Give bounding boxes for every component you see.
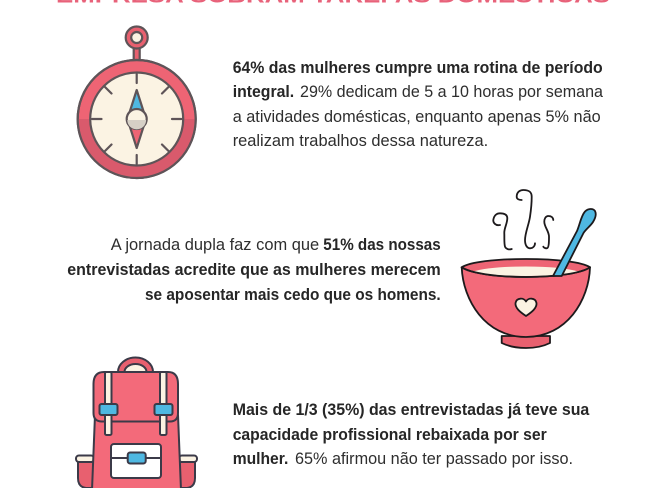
- text block: double shift: 51% das nossas: [323, 235, 441, 254]
- icon: bowl with steam and spoon: [462, 190, 596, 348]
- panel: professional capacity: [76, 358, 590, 488]
- text block: double shift: A jornada dupla faz com que: [111, 235, 319, 254]
- text block: professional capacity: [233, 400, 590, 468]
- text block: full-time routine: 64% das mulheres cumpre uma rotina de período: [233, 58, 603, 77]
- text block: full-time routine: realizam trabalhos dessa natureza.: [233, 131, 488, 150]
- text block: double shift: [67, 235, 441, 304]
- text block: full-time routine: [233, 58, 604, 150]
- text block: professional capacity: capacidade profissional rebaixada por ser: [233, 425, 547, 444]
- steam: [493, 190, 553, 249]
- text block: professional capacity: Mais de 1/3 (35%) das entrevistadas já teve sua: [233, 400, 590, 419]
- panel: double shift: [67, 190, 596, 348]
- icon: compass: [78, 26, 196, 178]
- text block: double shift: se aposentar mais cedo que os homens.: [145, 285, 441, 304]
- text block: professional capacity: mulher.: [233, 449, 288, 468]
- text block: double shift: entrevistadas acredite que as mulheres merecem: [67, 260, 441, 279]
- icon: backpack: [76, 358, 197, 488]
- text block: full-time routine: integral.: [233, 82, 294, 101]
- panel: full-time routine: [78, 26, 604, 178]
- text block: professional capacity: 65% afirmou não ter passado por isso.: [295, 449, 573, 468]
- text block: full-time routine: 29% dedicam de 5 a 10 horas por semana: [300, 82, 604, 101]
- text block: full-time routine: a atividades domésticas, enquanto apenas 5% não: [233, 107, 601, 126]
